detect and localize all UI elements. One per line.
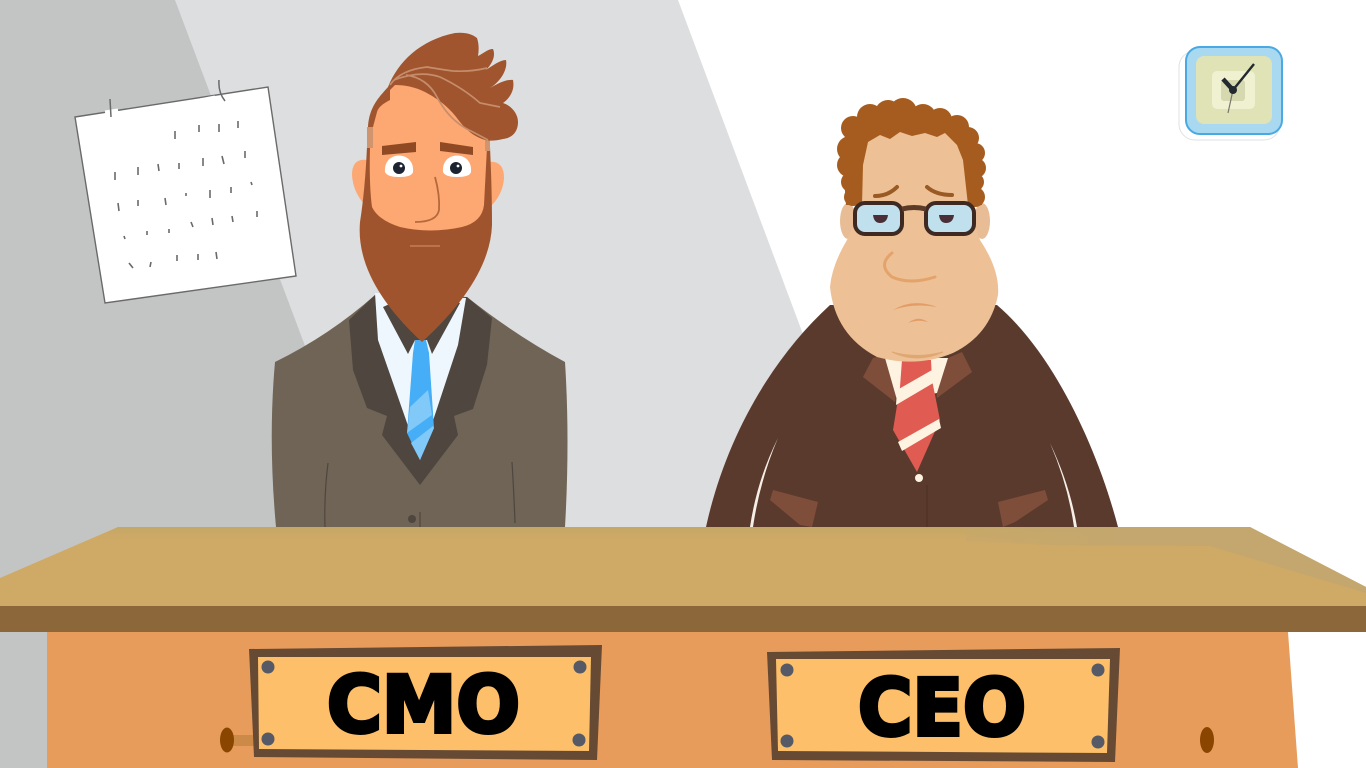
CEO eyebrows [875, 187, 952, 196]
CEO striped tie [893, 360, 941, 472]
CMO blue tie [407, 340, 434, 460]
CMO beard [360, 147, 492, 342]
CMO collar [383, 290, 460, 354]
CEO shirt [885, 358, 948, 400]
CEO glasses [855, 203, 974, 234]
desk top shading [966, 527, 1366, 593]
CMO eyebrows [382, 142, 473, 155]
CMO sideburn highlight [367, 127, 490, 151]
CEO jacket seams [750, 438, 1077, 527]
CEO frowning mouth [892, 303, 943, 358]
CEO ears [840, 203, 990, 239]
character: CEO with glasses [706, 98, 1118, 527]
character: CMO with beard [272, 33, 568, 527]
desk top surface [0, 527, 1366, 606]
desk [0, 527, 1366, 768]
CMO face [365, 84, 490, 240]
right drawer knob [1200, 727, 1214, 753]
desk front body [47, 632, 1298, 768]
CMO hair highlight strands [390, 67, 500, 140]
CEO head [830, 132, 998, 362]
nameplate: CMO [249, 645, 602, 760]
CMO beard line [410, 245, 440, 247]
calendar on wall [75, 80, 296, 303]
desk edge [0, 606, 1366, 632]
label CMO: CMO [327, 661, 520, 751]
CEO eyelids [873, 215, 954, 223]
CMO grey suit jacket [272, 295, 568, 527]
CMO hair [368, 33, 518, 141]
CEO button [915, 474, 923, 482]
CMO shirt [375, 293, 466, 460]
CEO brown suit jacket [706, 305, 1118, 527]
nameplate: CEO [767, 648, 1120, 762]
clock icon [1179, 47, 1282, 140]
CMO nose [415, 177, 439, 222]
CMO eyes [385, 156, 471, 177]
CEO pockets [770, 490, 1048, 527]
CMO ears [352, 160, 504, 208]
CMO jacket creases and button [325, 462, 515, 527]
CEO curly hair [837, 98, 986, 207]
desk top strip [92, 527, 1260, 540]
CEO nose [884, 253, 935, 281]
left drawer knob [220, 728, 254, 752]
CMO lapels [349, 295, 492, 485]
label CEO: CEO [858, 664, 1026, 754]
CEO lapels [863, 352, 972, 402]
